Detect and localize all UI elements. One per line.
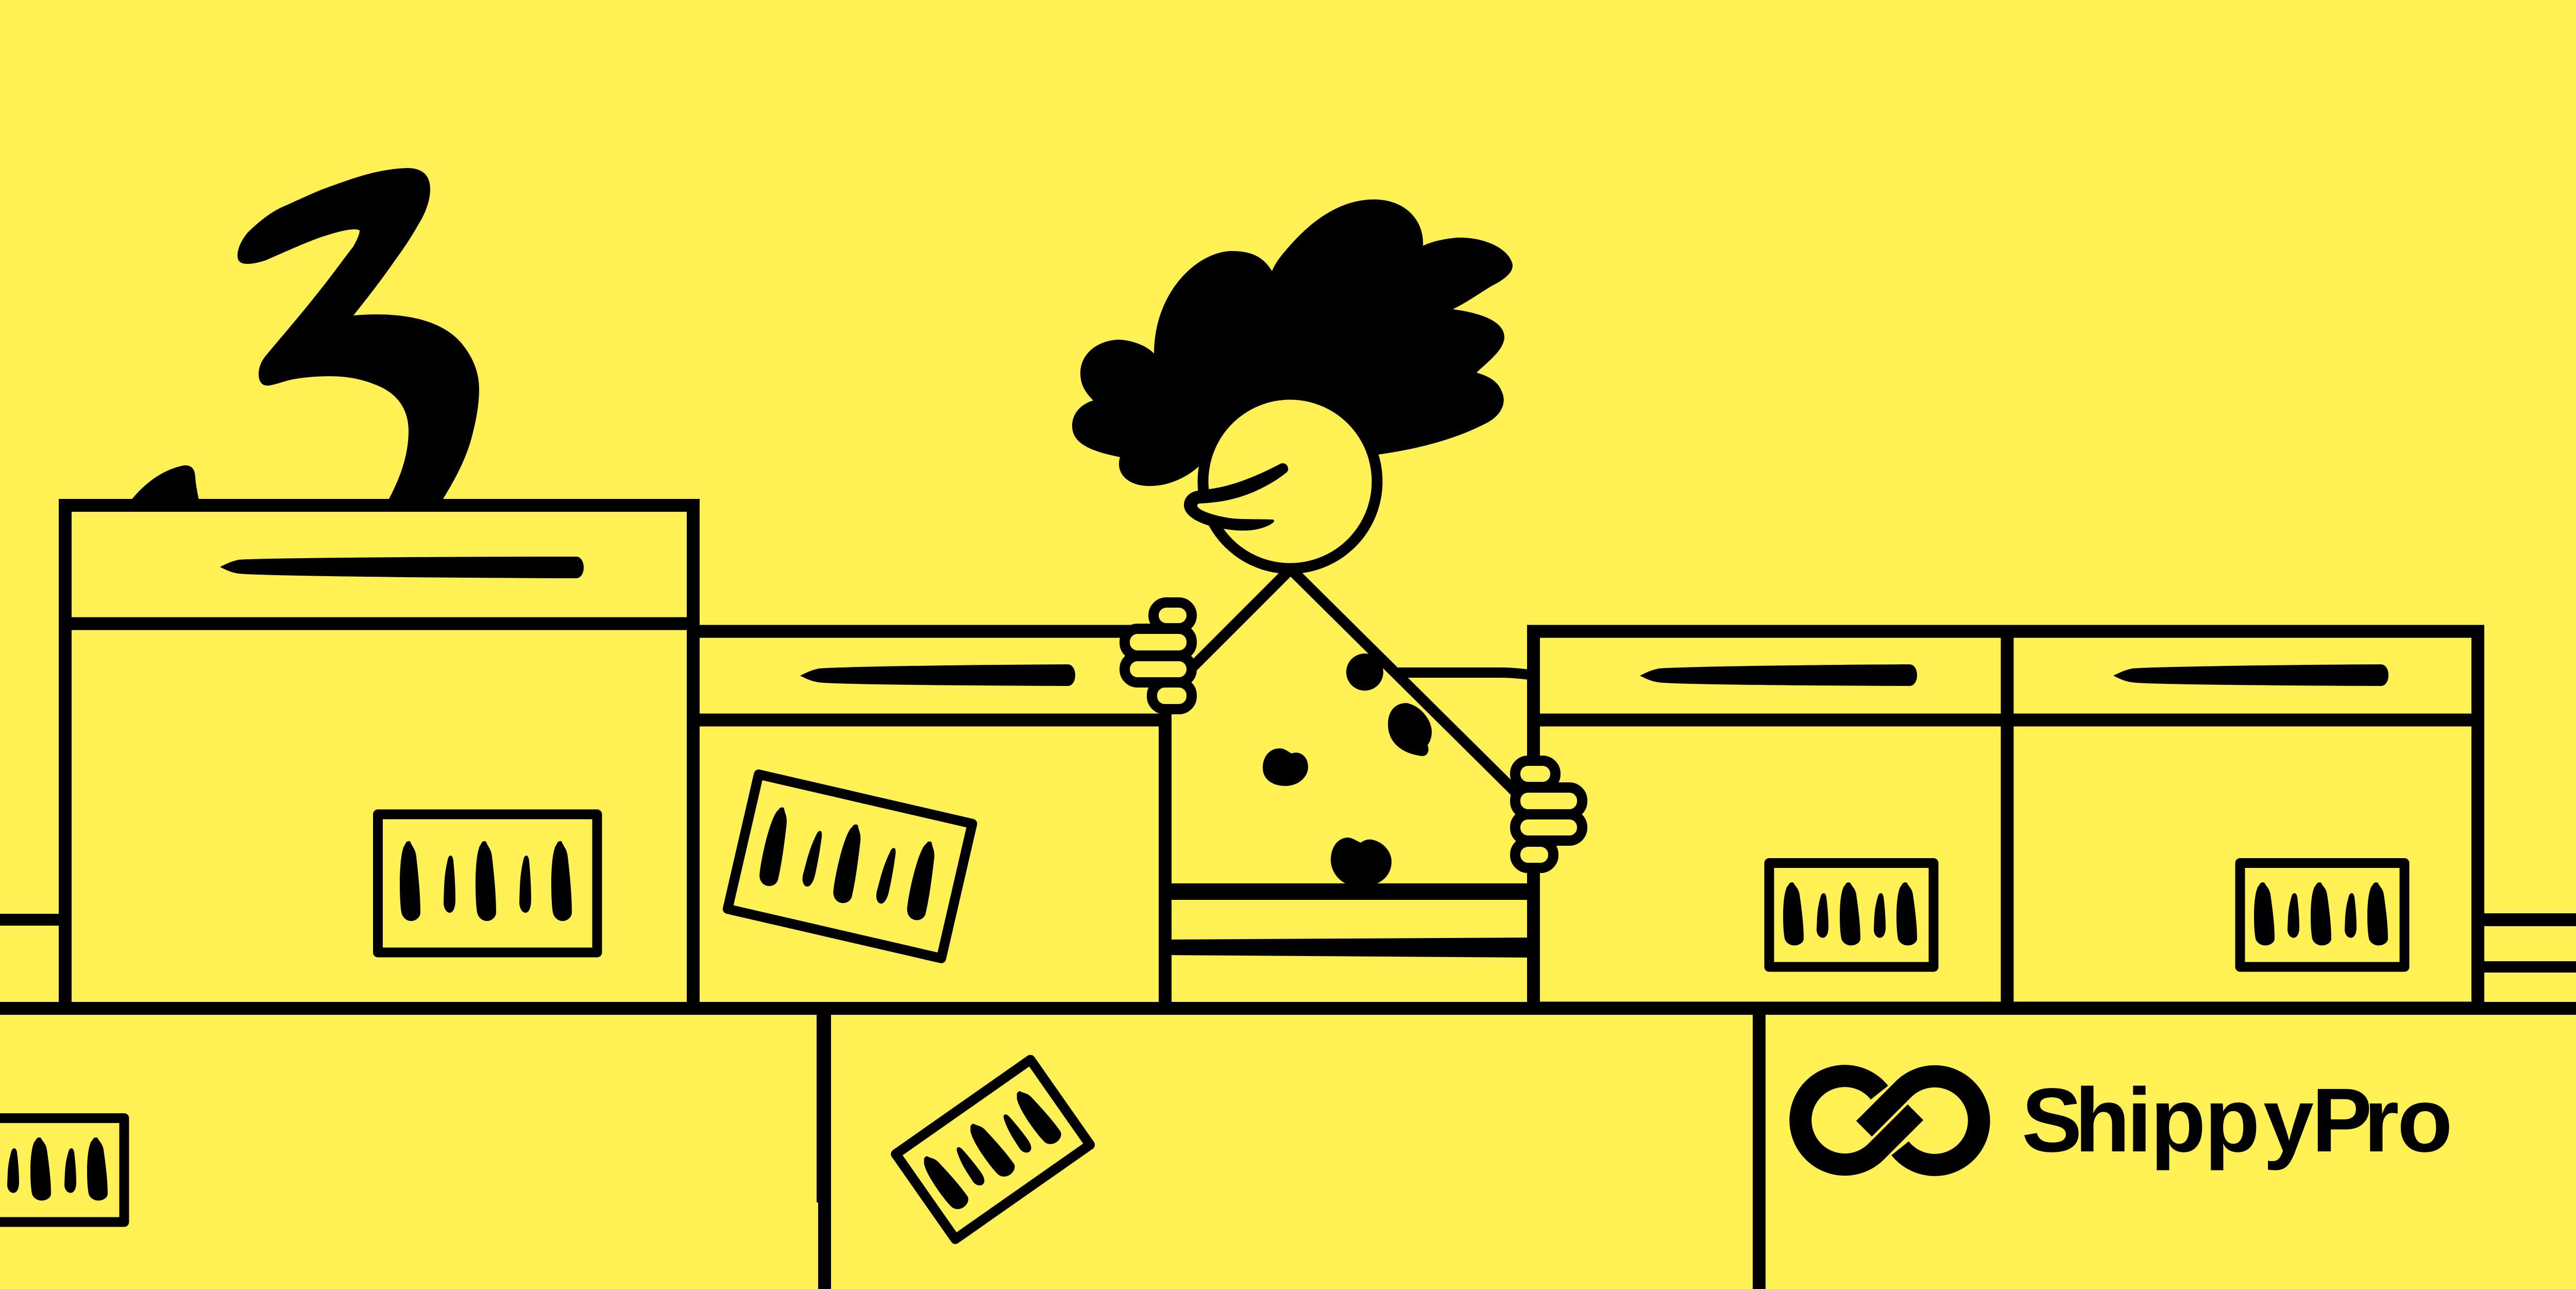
shipping label: bottom left, cropped xyxy=(0,1118,124,1222)
shipping label: fourth box xyxy=(2240,863,2404,967)
box: centre box behind the person xyxy=(1162,667,1535,958)
box slot: third box xyxy=(1640,664,1917,686)
logo mark: linked rings xyxy=(1801,1076,1979,1165)
box: large left box xyxy=(65,505,693,1008)
head xyxy=(1203,394,1377,568)
person xyxy=(1072,199,1582,888)
floor line xyxy=(0,1002,2576,1015)
box slot: fourth box xyxy=(2113,664,2388,686)
box: second box xyxy=(693,631,1165,1008)
ShippyPro logo xyxy=(1801,1070,2453,1171)
lower row box dividers xyxy=(817,1010,1766,1289)
logo wordmark: ShippyPro xyxy=(2022,1070,2453,1171)
nose and mouth xyxy=(1184,463,1288,531)
shipping label: third box xyxy=(1769,863,1934,967)
right hand xyxy=(1515,761,1582,868)
side shelf lines xyxy=(0,913,2576,973)
number 3 rising from the large box xyxy=(131,168,479,500)
box slot: large box xyxy=(220,557,584,578)
shipping label: tilted on second box xyxy=(727,775,972,958)
box slot: second box xyxy=(800,664,1075,686)
shipping label: rotated on lower box xyxy=(896,1060,1090,1239)
hair xyxy=(1072,199,1513,486)
shipping label: large box xyxy=(378,814,597,952)
arms and torso xyxy=(1190,569,1517,794)
boxes: two right boxes xyxy=(1533,631,2478,1008)
left hand xyxy=(1125,602,1192,709)
belly spots xyxy=(1263,654,1432,888)
